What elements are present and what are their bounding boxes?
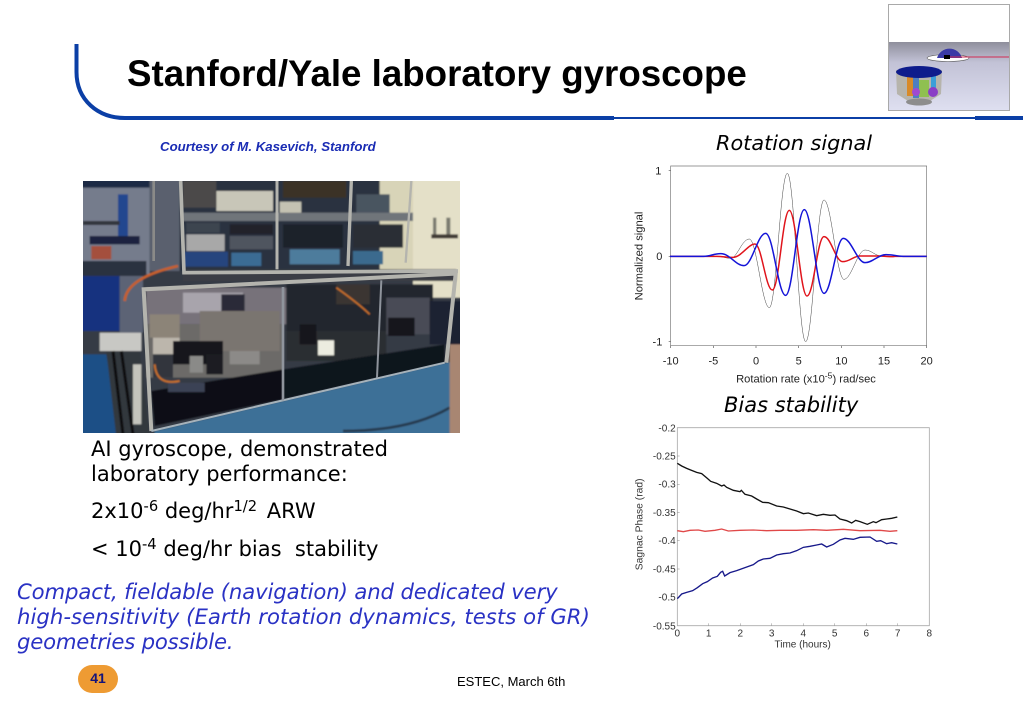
page number badge: [78, 665, 118, 693]
chart: rotation signal: 0: [753, 355, 759, 367]
heading: bias stability: Bias stability: [724, 393, 858, 417]
page number badge: 41: [90, 670, 106, 686]
header rule and corner curve: [74, 44, 1023, 120]
chart: bias stability: 7: [895, 629, 901, 640]
chart: rotation signal: 10: [835, 355, 847, 367]
chart: bias stability: 8: [927, 629, 933, 640]
chart: bias stability: 4: [801, 629, 807, 640]
chart: rotation signal: 1: [655, 165, 661, 177]
chart: rotation signal: -10: [663, 355, 679, 367]
description: laboratory performance:: [91, 462, 348, 486]
frame bars: [144, 181, 458, 431]
black trace: [677, 463, 897, 524]
blue conclusion text: [17, 579, 590, 654]
chart: bias stability: -0.55: [653, 622, 676, 633]
chart: bias stability: Time (hours): [775, 639, 831, 650]
blue curve: [670, 210, 927, 295]
description: AI gyroscope, demonstrated: [91, 437, 388, 461]
red curve: [670, 210, 927, 296]
chart: bias stability: 3: [769, 629, 775, 640]
description: [91, 437, 388, 486]
chart: rotation signal: -1: [653, 336, 662, 348]
chart: bias stability: -0.45: [653, 564, 676, 575]
chart: bias stability: 0: [675, 629, 681, 640]
footer: ESTEC, March 6th: [457, 674, 565, 689]
red trace: [677, 529, 897, 532]
chart: bias stability: Sagnac Phase (rad): [634, 478, 645, 570]
blue conclusion text: Compact, fieldable (navigation) and dedicated very: [17, 579, 558, 604]
chart: rotation signal: -5: [708, 355, 718, 367]
chart: rotation signal: 20: [921, 355, 933, 367]
courtesy credit: Courtesy of M. Kasevich, Stanford: [160, 139, 376, 154]
thumbnail: satellite and sphere: [888, 4, 1010, 111]
chart: rotation signal: 5: [796, 355, 802, 367]
chart: bias stability: -0.2: [658, 423, 676, 434]
chart: bias stability: -0.25: [653, 452, 676, 463]
chart: rotation signal: ) rad/sec: [832, 373, 876, 385]
chart: rotation signal: Normalized signal: [633, 212, 645, 300]
ARW value: 2x10-6 deg/hr1/2 ARW: [91, 498, 316, 523]
black curve: [670, 173, 927, 342]
chart: bias stability: 5: [832, 629, 838, 640]
chart: rotation signal: Rotation rate (x10: [736, 373, 825, 385]
chart: bias stability: 1: [706, 629, 712, 640]
chart: rotation signal: 15: [878, 355, 890, 367]
chart: bias stability: -0.35: [653, 508, 676, 519]
chart: bias stability: 6: [864, 629, 870, 640]
chart: rotation signal: 0: [656, 251, 662, 263]
text block: gyroscope performance: [91, 437, 388, 561]
chart: rotation signal: [633, 165, 933, 385]
bias stability value: < 10-4 deg/hr bias stability: [91, 536, 378, 561]
blue conclusion text: geometries possible.: [17, 629, 233, 654]
title: Stanford/Yale laboratory gyroscope: [127, 53, 747, 94]
chart: bias stability: -0.5: [658, 593, 676, 604]
chart: bias stability: [634, 423, 933, 650]
blue conclusion text: high-sensitivity (Earth rotation dynamics, tests of GR): [17, 604, 590, 629]
blue trace: [677, 537, 897, 599]
chart: rotation signal: -5: [825, 370, 833, 380]
heading: rotation signal: Rotation signal: [716, 131, 872, 155]
chart: bias stability: -0.4: [658, 536, 676, 547]
chart: bias stability: -0.3: [658, 479, 676, 490]
photo: laboratory gyroscope apparatus: [83, 181, 460, 433]
chart: bias stability: 2: [738, 629, 744, 640]
